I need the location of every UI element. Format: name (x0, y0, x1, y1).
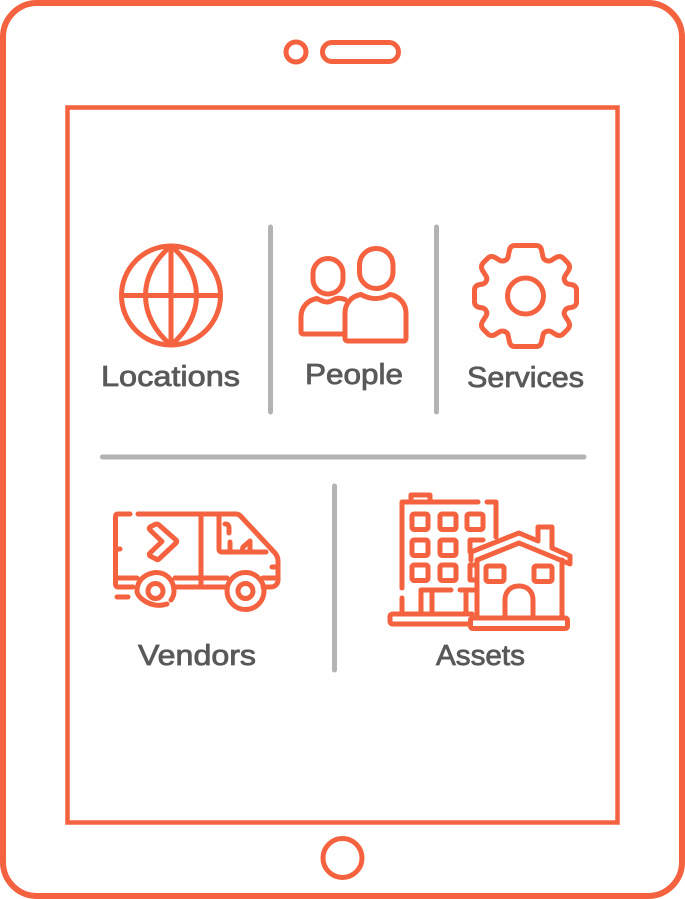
dividers (102, 227, 584, 670)
label: Services: Services (467, 362, 584, 394)
icon: globe (122, 246, 220, 345)
tablet camera (286, 42, 306, 62)
icon: delivery van (116, 514, 278, 610)
label: People: People (305, 359, 403, 391)
label: Locations: Locations (101, 361, 240, 393)
label: Vendors: Vendors (138, 640, 256, 672)
tablet home button (323, 838, 362, 878)
tablet screen (68, 108, 618, 822)
icon: buildings (390, 495, 570, 628)
label: Assets: Assets (436, 640, 525, 672)
icon: gear (474, 246, 576, 346)
tablet speaker (322, 42, 398, 62)
icon: people (301, 248, 406, 341)
